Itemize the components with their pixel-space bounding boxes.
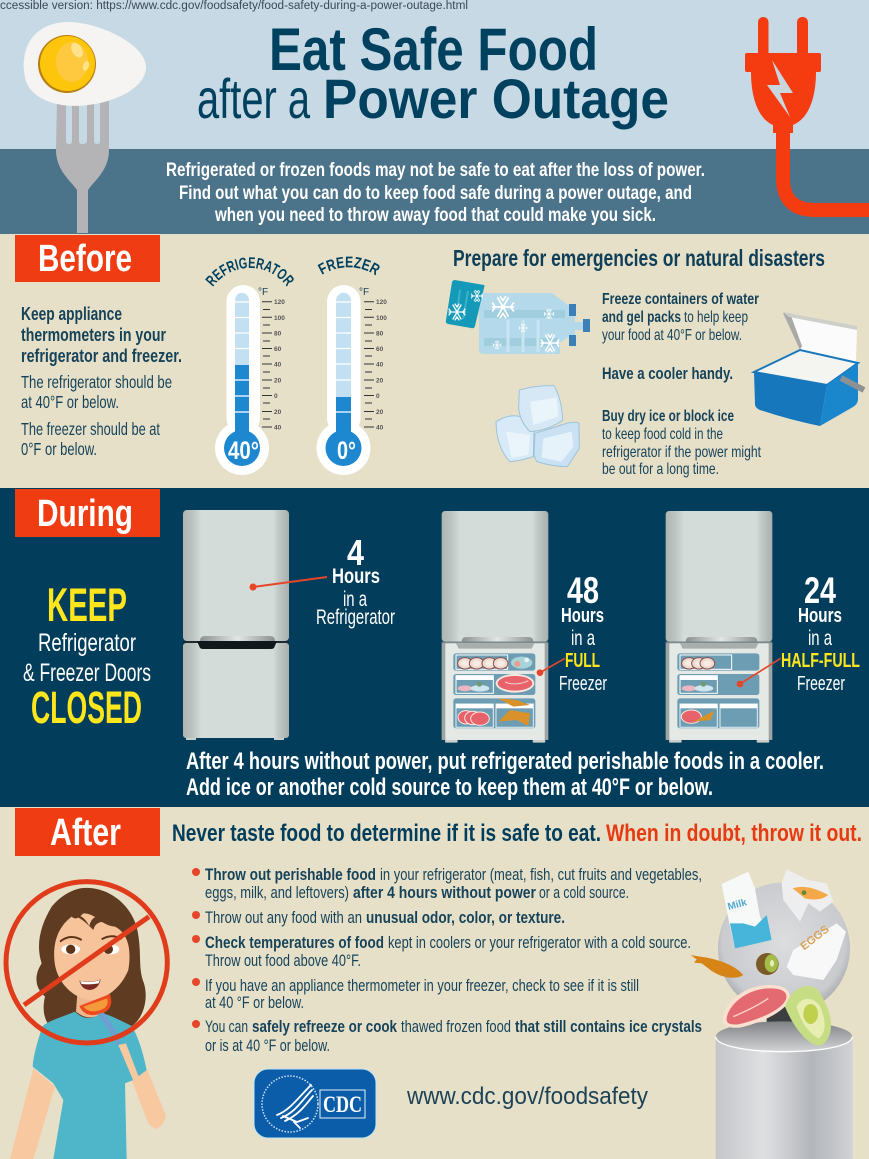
bullet: appliance thermometer: If you have an appliance thermometer in your freezer, check to see if it is still [205, 977, 639, 995]
bullet: throw out perishable food: eggs, milk, and leftovers) [205, 884, 349, 902]
text: keep doors closed: Refrigerator [38, 629, 136, 657]
logo: CDC: CDC [323, 1092, 362, 1117]
intro text: when you need to throw away food that could make you sick. [214, 204, 656, 226]
text: keep appliance thermometers: The freezer should be at [21, 419, 160, 439]
text: 24 hours in a half-full freezer [781, 570, 860, 695]
bullet: throw out perishable food [192, 866, 702, 902]
icon: frozen water bottles and gel pack [446, 280, 590, 354]
title [197, 16, 669, 130]
text: 4 hours in a refrigerator: Hours [332, 565, 380, 588]
bullet: refreeze or cook: or is at 40 °F or below. [205, 1037, 330, 1055]
text: after 4 hours without power [186, 748, 824, 801]
mouth [79, 979, 101, 990]
shirt [33, 1012, 147, 1159]
text: 48 hours in a full freezer: Hours [561, 604, 604, 627]
kiwi [756, 953, 779, 975]
icon: food going into trash can [691, 869, 853, 1159]
text: buy dry ice [602, 408, 761, 478]
bullet list [192, 866, 702, 1055]
thermometer scale: 60 [274, 346, 282, 353]
chart: freezer thermometer at 0 degrees [316, 256, 387, 475]
title: Power Outage [323, 67, 669, 130]
hair [36, 888, 146, 1027]
thermometer scale [262, 299, 285, 432]
text: freeze containers [602, 291, 759, 344]
icon: food going into trash can: Milk [727, 897, 749, 913]
text: have a cooler handy: Have a cooler handy. [602, 365, 733, 383]
panel: after [6, 808, 862, 1159]
thermometer scale [364, 299, 387, 432]
text: 24 hours in a half-full freezer: 24 [804, 570, 836, 611]
text: 4 hours in a refrigerator: 4 [347, 532, 364, 573]
bullet: unusual odor [192, 909, 565, 927]
bullet: check temperatures: Throw out food above 40°F. [205, 952, 361, 970]
steak [723, 985, 790, 1028]
text: keep appliance thermometers: thermometers in your [21, 325, 166, 345]
thermometer scale: 40 [274, 362, 282, 368]
header banner [0, 0, 869, 234]
icon: half-full freezer [666, 511, 781, 743]
text: buy dry ice: be out for a long time. [602, 461, 719, 478]
chart: freezer thermometer at 0 degrees: °F [359, 287, 369, 298]
text: keep doors closed: KEEP [47, 578, 127, 631]
chart: refrigerator thermometer at 40 degrees: 40° [228, 437, 259, 465]
bullet: throw out perishable food: in your refrigerator (meat, fish, cut fruits and vegetables, [380, 866, 702, 884]
text: keep appliance thermometers: Keep appliance [21, 304, 122, 324]
text: freeze containers: Freeze containers of water [602, 291, 759, 308]
chart: freezer thermometer at 0 degrees: FREEZER [318, 256, 380, 276]
illustration: woman with prohibition sign [6, 882, 167, 1159]
thermometer scale: 100 [376, 315, 387, 322]
thermometer scale: 0 [376, 393, 380, 400]
text: freeze containers: to help keep [684, 309, 748, 326]
bullet: refreeze or cook [192, 1018, 702, 1055]
heading: During: During [37, 493, 133, 535]
title: Eat Safe Food [269, 16, 598, 83]
text: 4 hours in a refrigerator: Refrigerator [316, 606, 395, 629]
accessible version URL: ccessible version: https://www.cdc.gov/foodsafety/food-safety-during-a-power-outage.html [0, 0, 468, 12]
thermometer scale: 120 [376, 299, 387, 306]
text: keep appliance thermometers: refrigerator and freezer. [21, 346, 182, 366]
bullet: throw out perishable food: Throw out perishable food [205, 866, 376, 884]
icon: ice cubes [496, 386, 579, 467]
tomato wedge [79, 994, 111, 1015]
intro text: Refrigerated or frozen foods may not be safe to eat after the loss of power. [166, 159, 705, 181]
hand and forearm [118, 1043, 139, 1081]
text: keep appliance thermometers: 0°F or below. [21, 439, 97, 459]
text: keep appliance thermometers [21, 304, 182, 459]
thermometer scale: 20 [376, 409, 384, 416]
trash can [716, 1037, 853, 1159]
takeout box [782, 869, 833, 922]
chart: freezer thermometer at 0 degrees: 0° [337, 437, 356, 465]
text: 48 hours in a full freezer [559, 570, 607, 695]
HHS eagle [277, 1085, 313, 1128]
bullet: unusual odor: unusual odor, color, or texture. [366, 909, 565, 927]
text: 48 hours in a full freezer: FULL [565, 649, 600, 672]
thermometer scale: 40 [274, 424, 282, 432]
bullet: refreeze or cook: You can [205, 1018, 248, 1036]
intro text: Find out what you can do to keep food safe during a power outage, and [179, 182, 692, 204]
panel: before [15, 235, 866, 478]
thermometer scale: 80 [274, 330, 282, 338]
text: 48 hours in a full freezer: in a [571, 627, 595, 650]
thermometer scale: 20 [274, 409, 282, 416]
title: after a [197, 67, 311, 130]
text: keep doors closed: CLOSED [31, 682, 142, 733]
thermometer scale: 40 [376, 424, 384, 432]
text: keep doors closed [23, 578, 151, 733]
bullet: unusual odor: Throw out any food with an [205, 909, 362, 927]
text: keep appliance thermometers: The refrigerator should be [21, 372, 172, 392]
thermometer scale: 80 [376, 330, 384, 338]
bullet: appliance thermometer [192, 977, 639, 1012]
thermometer scale: 0 [274, 393, 278, 400]
thermometer scale: 20 [274, 378, 282, 384]
bullet: throw out perishable food: after 4 hours without power [353, 884, 536, 902]
bullet: check temperatures [192, 934, 691, 970]
milk carton [722, 872, 772, 948]
thermometer scale: 60 [376, 346, 384, 353]
heading: Before: Before [38, 238, 132, 280]
heading: After [15, 808, 160, 856]
fork [97, 1013, 121, 1045]
bullet: refreeze or cook: that still contains ice crystals [515, 1018, 702, 1036]
text: buy dry ice: to keep food cold in the [602, 426, 723, 443]
heading: After: After [50, 812, 121, 854]
text: buy dry ice: refrigerator if the power might [602, 444, 761, 461]
bullet: throw out perishable food: or a cold source. [539, 884, 629, 902]
icon: fork with egg [24, 22, 146, 233]
text: 48 hours in a full freezer: Freezer [559, 672, 607, 695]
bullet: refreeze or cook: safely refreeze or cook [252, 1018, 398, 1036]
text: 4 hours in a refrigerator [316, 532, 395, 629]
icon: food going into trash can: EGGS [798, 923, 832, 953]
text: freeze containers: your food at 40°F or below. [602, 327, 742, 344]
lettuce [785, 986, 831, 1045]
headline: never taste food: Never taste food to determine if it is safe to eat. [172, 820, 601, 847]
text: 4 hours in a refrigerator: in a [343, 588, 367, 611]
bullet: refreeze or cook: thawed frozen food [401, 1018, 511, 1036]
chart: refrigerator thermometer at 40 degrees: °F [258, 287, 268, 298]
bullet: check temperatures: kept in coolers or your refrigerator with a cold source. [388, 934, 691, 952]
prohibition sign [6, 882, 167, 1043]
eyes [61, 944, 80, 954]
website URL: www.cdc.gov/foodsafety [406, 1083, 648, 1110]
icon: closed refrigerator [183, 510, 327, 740]
text: 24 hours in a half-full freezer: Hours [798, 604, 842, 627]
neck and face [76, 993, 103, 1017]
text: buy dry ice: Buy dry ice or block ice [602, 408, 734, 425]
text: keep appliance thermometers: at 40°F or below. [21, 392, 119, 412]
thermometer scale: 40 [376, 362, 384, 368]
logo: CDC [254, 1069, 376, 1138]
chart: refrigerator thermometer at 40 degrees: REFRIGERATOR [205, 257, 294, 287]
text: 48 hours in a full freezer: 48 [567, 570, 599, 611]
plate [718, 882, 850, 1014]
panel: during [0, 488, 869, 807]
text: 24 hours in a half-full freezer: Freezer [797, 672, 845, 695]
bullet: appliance thermometer: at 40 °F or below. [205, 994, 304, 1012]
icon: full freezer [442, 511, 565, 743]
thermometer scale: 100 [274, 315, 285, 322]
chart: refrigerator thermometer at 40 degrees [205, 257, 294, 475]
egg carton [787, 923, 846, 980]
intro text [166, 159, 705, 226]
thermometer scale: 20 [376, 378, 384, 384]
icon: cooler [754, 312, 864, 426]
icon: electric plug with cord [745, 17, 869, 210]
bullet: check temperatures: Check temperatures of food [205, 934, 384, 952]
thermometer scale: 120 [274, 299, 285, 306]
text: freeze containers: and gel packs [602, 309, 681, 326]
text: keep doors closed: & Freezer Doors [23, 659, 151, 687]
arms [10, 1068, 166, 1159]
text: 24 hours in a half-full freezer: in a [808, 627, 832, 650]
fish [691, 955, 743, 978]
